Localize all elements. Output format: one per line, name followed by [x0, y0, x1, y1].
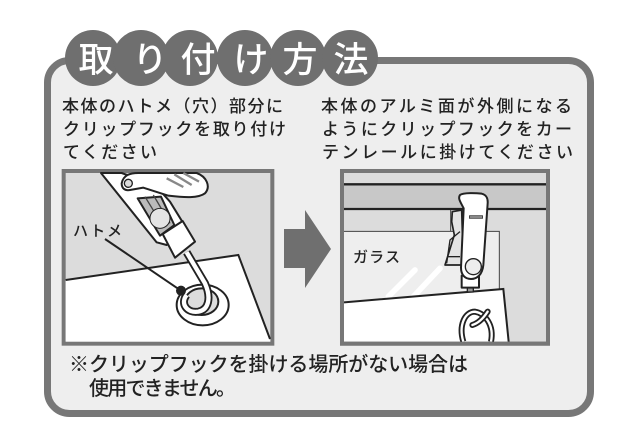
- eyelet: [177, 285, 229, 325]
- window glass: [344, 232, 499, 302]
- label: eyelet pointer: [105, 239, 181, 291]
- label: glass: ガラス: [353, 249, 400, 266]
- illustration: attaching the hook to the eyelet: [64, 171, 272, 344]
- curtain rail: [344, 185, 547, 209]
- hook wire: [184, 252, 208, 312]
- text block: right instruction: [321, 96, 573, 162]
- text block: right instruction: テンレールに掛けてください: [322, 143, 573, 162]
- text block: left instruction: 本体のハトメ（穴）部分に: [62, 97, 283, 116]
- arrow: [284, 210, 331, 288]
- panel: instructions card: [48, 60, 590, 414]
- text block: note: [69, 353, 468, 400]
- text block: left instruction: クリップフックを取り付け: [63, 120, 286, 139]
- illustration: hook on curtain rail: [342, 171, 548, 344]
- hanging sheet: [344, 289, 509, 342]
- text block: left instruction: [62, 97, 286, 162]
- text block: left instruction: てください: [63, 143, 157, 162]
- paper sheet: [66, 255, 270, 342]
- title: scalloped heading: [65, 30, 378, 86]
- label: eyelet: ハトメ: [73, 223, 122, 240]
- text block: note: ※クリップフックを掛ける場所がない場合は: [69, 353, 468, 376]
- text block: right instruction: ようにクリップフックをカー: [322, 120, 572, 139]
- title: scalloped heading: り: [132, 41, 168, 80]
- clip body: [101, 173, 208, 258]
- title: scalloped heading: け: [233, 41, 269, 80]
- text block: right instruction: 本体のアルミ面が外側になる: [321, 96, 572, 116]
- clip and hook: [445, 193, 488, 292]
- title: scalloped heading: 方: [282, 41, 318, 80]
- text block: note: 使用できません。: [89, 377, 236, 400]
- title: scalloped heading: 取: [78, 41, 114, 80]
- title: scalloped heading: 付: [180, 41, 216, 80]
- title: scalloped heading: 法: [333, 41, 369, 80]
- hook ring on sheet: [462, 312, 492, 342]
